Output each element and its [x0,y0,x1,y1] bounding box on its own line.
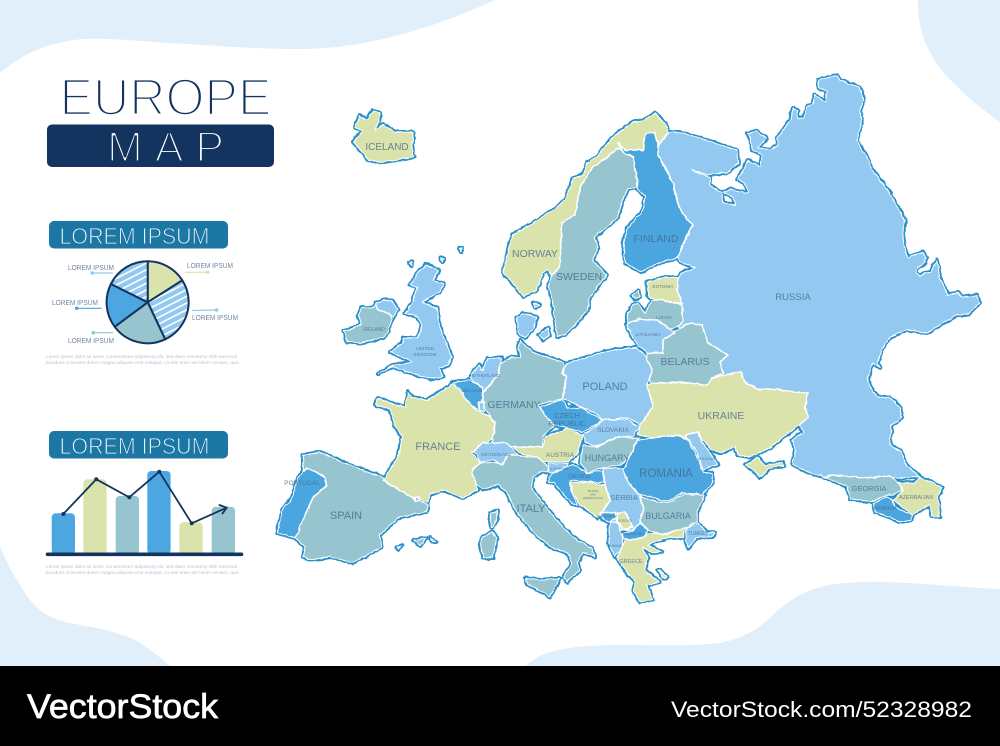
country: Croatia [548,464,605,505]
pie callout: top right [185,261,233,274]
pie callout: bottom [68,331,114,345]
label: Switzerland: SWITZERLAND [481,452,511,457]
label: Albania: ALBANIA [608,544,623,548]
pie description text [46,354,240,365]
heading bar: Map: MAP [107,124,224,172]
label: Estonia: ESTONIA [653,284,674,290]
country names [284,142,933,565]
panel: bar chart [46,431,242,575]
label: Greece: GREECE [619,559,643,565]
label: Kosovo: KOSOVO [618,519,632,523]
country: Slovakia [583,419,640,447]
label: United Kingdom [414,346,436,358]
country: Turkey [685,523,715,548]
label: Romania: ROMANIA [639,468,693,480]
country: Switzerland [473,443,518,465]
pie slice: hatched right [148,280,189,339]
axis [48,552,242,556]
pie callout: right [192,308,238,322]
label: Lithuania: LITHUANIA [635,332,661,338]
country: United Kingdom [375,248,462,379]
pie callout: left: LOREM IPSUM [52,298,98,307]
pie slice: hatched left [111,261,148,302]
country: Armenia [873,496,912,522]
pie slice: blue [107,284,148,327]
bar chart description text: Lorem ipsum dolor sit amet, consectetuer adipiscing elit, sed diam nonummy nibh euismod [46,564,237,569]
background blob: top left [0,0,495,73]
label: Portugal: PORTUGAL [284,480,320,487]
pie slice: teal [115,302,165,343]
country: Italy [470,455,595,597]
label: Iceland: ICELAND [365,142,409,153]
pie callout: right: LOREM IPSUM [192,313,238,322]
country: Czech Republic [540,399,603,433]
label: Finland: FINLAND [634,233,679,245]
label: Netherlands: NETHERLAND [470,373,501,378]
label: Czech Republic: REPUBLIC [548,419,586,428]
label: France: FRANCE [415,441,461,453]
label: Bosnia and Herzegovina: BOSNIA [588,489,598,493]
country: Andorra [415,497,419,501]
country: Belarus [645,323,728,390]
bar chart description text [46,564,240,575]
label: Slovakia: SLOVAKIA [597,427,630,434]
label: Germany: GERMANY [487,399,541,411]
label: Ireland: IRELAND [363,327,385,333]
country: Moldova [685,432,718,470]
label: Bosnia and Herzegovina [583,489,603,500]
country: Spain [295,452,436,563]
pie callout: top left [68,263,114,275]
label: Georgia: GEORGIA [851,484,887,493]
label: Czech Republic: CZECH [554,411,580,420]
label: Slovenia: SLOVENIA [548,467,568,471]
label: Serbia: SERBIA [610,493,638,502]
bar chart description text: tincidunt ut laoreet dolore magna aliquam erat volutpat. Ut wisi enim ad minim veniam, quis [46,570,240,575]
country: Slovenia [548,463,568,475]
label: United Kingdom: UNITED [416,346,434,352]
country: Sweden [548,148,640,337]
country: Azerbaijan [893,477,943,517]
country: Kosovo [617,512,633,530]
label: Hungary: HUNGARY [585,453,629,463]
country: Netherlands [470,358,502,393]
country: Crimea [745,457,784,478]
country: Macedonia [622,523,648,540]
label: Austria: AUSTRIA [546,452,575,459]
country: Lithuania [626,319,675,353]
label: Moldova: MOLDOVA [697,457,715,461]
footer logo: VectorStock [27,688,219,726]
country: Austria [512,428,583,462]
bars [52,471,235,555]
country: France [375,383,497,503]
pie slice: green [148,261,182,302]
country: Norway [503,113,668,297]
label: Spain: SPAIN [330,510,362,522]
pie description text: tincidunt ut laoreet dolore magna aliquam erat volutpat. Ut wisi enim ad minim veniam, quis [46,360,240,365]
label: Norway: NORWAY [512,248,558,260]
country: Germany [482,340,570,447]
map of Europe [277,75,980,602]
pie callout: top right: LOREM IPSUM [187,261,233,270]
country: Finland [618,132,693,272]
section header: LOREM IPSUM [60,433,210,459]
label: Bulgaria: BULGARIA [645,511,691,521]
label: Russia: RUSSIA [775,292,811,303]
label: Ukraine: UKRAINE [698,410,744,422]
pie callout: bottom: LOREM IPSUM [68,336,114,345]
country: Montenegro [600,512,617,522]
country: Iceland [353,110,414,162]
label: Sweden: SWEDEN [556,271,602,283]
label: Armenia: ARMENIA [874,506,897,512]
country: Ireland [344,304,392,343]
country: Luxembourg [478,402,484,412]
country: Bulgaria [640,494,705,535]
section header: LOREM IPSUM [60,223,210,249]
heading bar: Map [47,124,274,172]
label: Bosnia and Herzegovina: HERZEGOVINA [583,496,603,500]
country: Bosnia and Herzegovina [570,482,610,518]
label: Czech Republic [548,411,586,428]
pie callout: top left: LOREM IPSUM [68,263,114,272]
country: Georgia [825,475,903,502]
label: United Kingdom: KINGDOM [414,352,436,358]
heading: Europe: EUROPE [60,69,272,127]
country: Greece [617,526,687,602]
title [47,69,274,172]
trend line arrow [61,470,227,525]
label: Bosnia and Herzegovina: AND [590,492,596,496]
country: Russia [655,75,980,479]
country: Denmark [517,303,550,340]
footer url: VectorStock.com/52328982 [671,697,972,722]
country: Ukraine [637,372,808,457]
label: Italy: ITALY [517,503,546,515]
footer bar [0,666,1000,746]
country: Romania [623,435,713,502]
pie chart [107,261,189,343]
label: Belarus: BELARUS [660,356,710,368]
country: Belgium [453,380,483,410]
country: Serbia [600,468,645,530]
country: Hungary [580,437,640,473]
label: Macedonia: MACEDONIA [623,532,645,536]
label: Croatia: CROATIA [568,474,591,480]
background blob: bottom right [526,582,1000,666]
label: Azerbaijan: AZERBAIJAN [899,495,933,501]
label: Turkey: TURKEY [688,531,709,537]
pie description text: Lorem ipsum dolor sit amet, consectetuer adipiscing elit, sed diam nonummy nibh euismod [46,354,237,359]
background blob: top right [918,0,1000,122]
background blob: bottom left [0,547,170,666]
country: Poland [562,347,653,425]
panel: pie chart [46,221,240,365]
label: Montenegro: MONTENEGRO [597,514,618,518]
label: Poland: POLAND [582,381,628,393]
country: Albania [608,522,623,557]
label: Latvia: LATVIA [656,315,673,321]
label: Belgium: BELGIUM [462,388,482,393]
coastline outline [277,75,980,602]
country: Estonia [647,277,682,304]
country: Latvia [627,300,683,330]
country: Portugal [277,468,327,538]
